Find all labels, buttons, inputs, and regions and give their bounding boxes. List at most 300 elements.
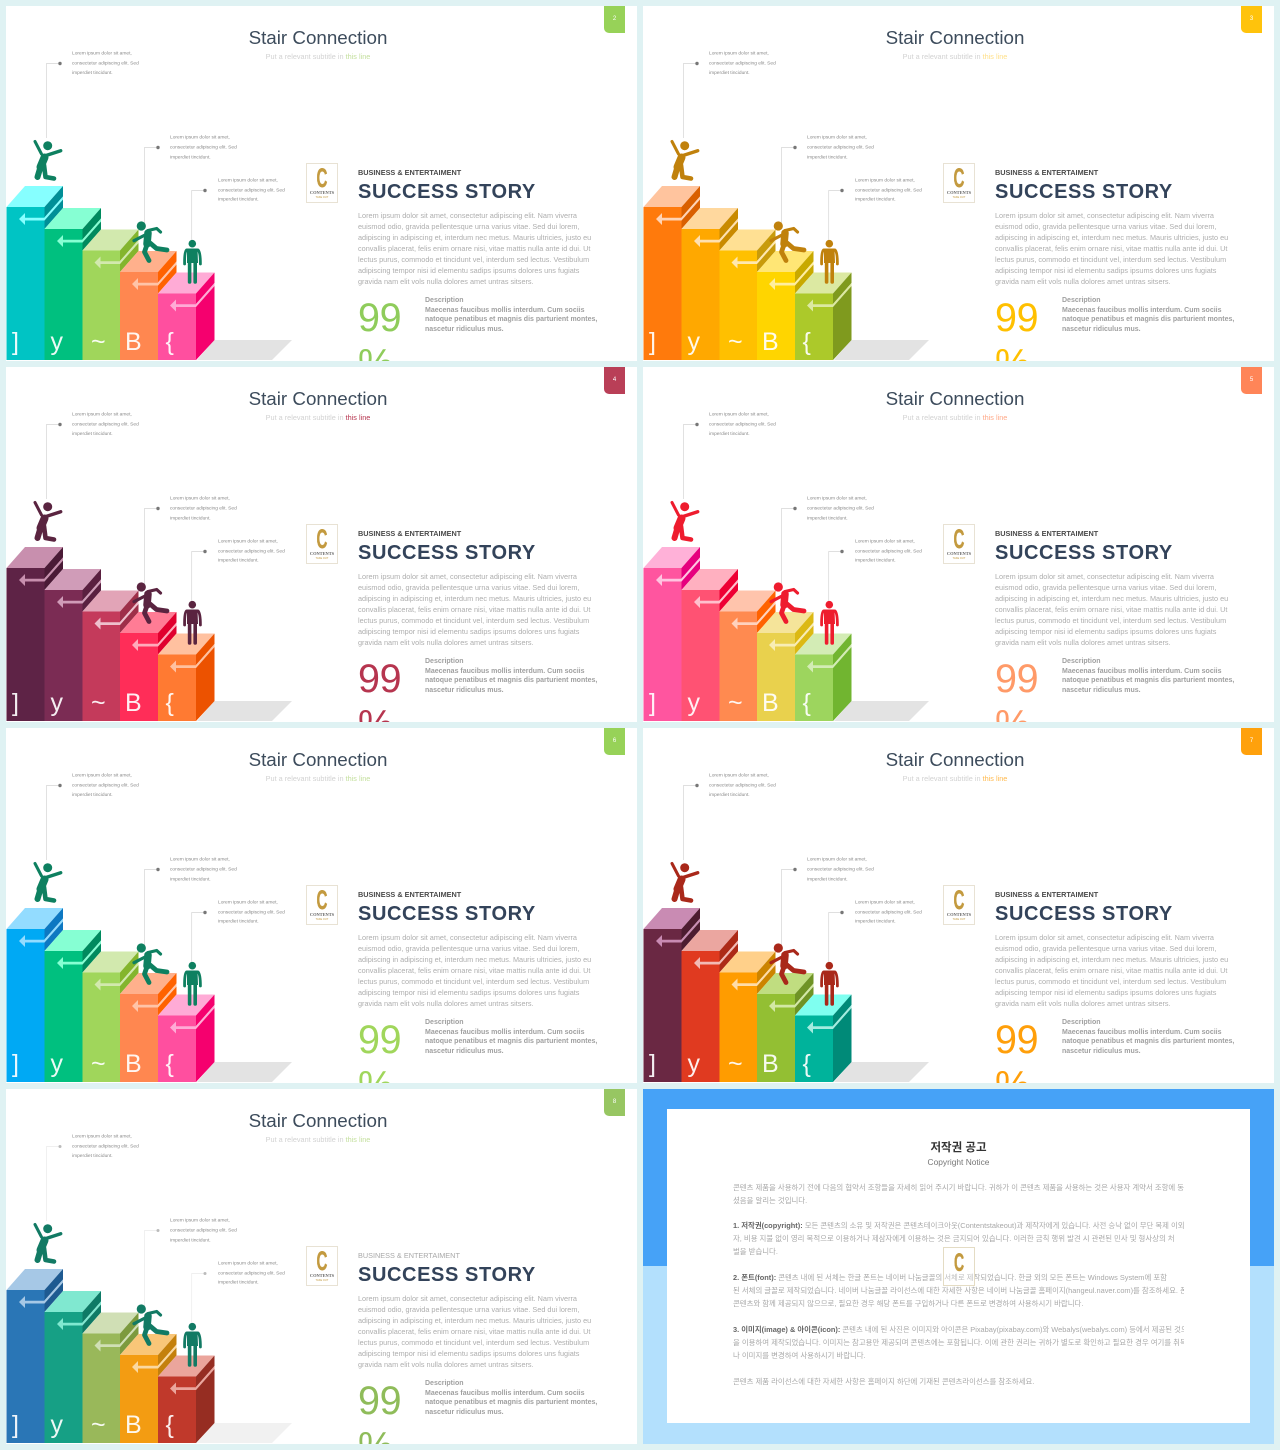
stair bar 3 [720,230,776,360]
title: Stair Connection [886,749,1024,770]
callout 1 [46,1133,139,1221]
eyebrow: BUSINESS & ENTERTAIMENT [995,890,1098,898]
subtitle: Put a relevant subtitle in this line [903,413,1007,422]
callout 1 [46,50,139,138]
bar icon glyphs [649,1050,811,1078]
stair bar 1 [6,1269,63,1443]
body text: euismod odio, gravida pellentesque urna varius vitae. Sed dui lorem, [358,583,579,592]
body text: convallis placerat, felis enim ornare nisi, vitae mattis nulla ante id dui. Ut [995,605,1227,614]
figure: standing person [822,601,837,643]
body text: euismod odio, gravida pellentesque urna varius vitae. Sed dui lorem, [358,222,579,231]
callout 1: imperdiet tincidunt. [709,70,750,76]
title: Stair Connection [249,27,387,48]
intro paragraph: 콘텐츠 제품을 사용하기 전에 다음의 협약서 조항들을 자세히 읽어 주시기 바랍니다. 귀하가 이 콘텐츠 제품을 사용하는 것은 사용자 계약서 조항에 동의하 [733,1183,1184,1192]
figure: standing person [185,1323,200,1365]
page badge [1241,728,1262,755]
panel: copyright notice [643,1089,1274,1444]
body text: convallis placerat, felis enim ornare nisi, vitae mattis nulla ante id dui. Ut [358,1327,590,1336]
bar icon glyphs: ~ [91,1050,106,1078]
body text: lectus purus, commodo et tincidunt vel, interdum sed lectus. Vestibulum [358,255,589,264]
subtitle: Put a relevant subtitle in this line [266,774,370,783]
figure: jumping person [672,502,698,540]
stair bar 1 [644,186,700,360]
figure: climbing person [771,943,804,982]
stair chart with callouts and figures [6,411,292,721]
body text: gravida nam elit vols nulla dolores amet untras sitsers. [995,999,1171,1008]
eyebrow: BUSINESS & ENTERTAIMENT [995,168,1098,176]
floor shadow [197,1062,292,1082]
bar icon glyphs: { [802,328,811,356]
callout 3: imperdiet tincidunt. [218,1280,259,1286]
callout 1: consectetur adipiscing elit. Sed [72,782,139,788]
page badge: 5 [1250,377,1253,383]
callout 1 [46,411,139,499]
description: Maecenas faucibus mollis interdum. Cum sociis [1062,1029,1222,1036]
description: nascetur ridiculus mus. [425,1048,504,1055]
bar icon glyphs: { [166,1050,174,1078]
description: natoque penatibus et magnis dis parturient montes, [425,1399,597,1406]
callout 1: Lorem ipsum dolor sit amet, [72,411,132,417]
logo: CONTENTS [947,190,971,195]
logo: C [954,885,964,915]
description [1062,296,1234,333]
stair bar 5 [158,634,214,721]
subtitle: Put a relevant subtitle in this line [266,52,370,61]
callout 3 [192,539,285,601]
big number: 99 [358,1018,401,1062]
logo: C [317,524,327,554]
callout 3: imperdiet tincidunt. [218,558,259,564]
page badge [604,728,625,755]
description: Maecenas faucibus mollis interdum. Cum sociis [425,1029,584,1036]
eyebrow: BUSINESS & ENTERTAIMENT [358,890,461,898]
intro paragraph [733,1183,1184,1205]
logo: CONTENTS [947,912,971,917]
stair bar 3 [720,590,776,721]
eyebrow: BUSINESS & ENTERTAIMENT [358,528,461,538]
stair bar 4 [120,1334,176,1443]
callout 2: imperdiet tincidunt. [807,515,848,521]
bar icon glyphs: { [166,328,174,356]
callout 3: consectetur adipiscing elit. Sed [218,910,285,916]
subtitle: Put a relevant subtitle in this line [903,774,1007,783]
callout 2: Lorem ipsum dolor sit amet, [807,857,867,863]
figure: standing person [185,962,200,1004]
stair bar 4 [757,612,814,721]
stair bar 1 [644,547,700,721]
big number [358,296,401,361]
title: Stair Connection [249,1110,387,1131]
callout 2 [144,135,237,223]
figure: standing person [822,240,837,282]
callout 1: consectetur adipiscing elit. Sed [72,1143,139,1149]
callout 2: imperdiet tincidunt. [170,515,211,521]
bar icon glyphs: ~ [728,689,743,717]
callout 1: consectetur adipiscing elit. Sed [709,421,776,427]
bar icon glyphs [649,689,811,717]
description: Description [425,658,464,665]
body text: euismod odio, gravida pellentesque urna varius vitae. Sed dui lorem, [358,1305,579,1314]
callout 2 [144,1218,237,1306]
floor shadow [197,701,292,721]
callout 2 [144,857,237,945]
callout 3: Lorem ipsum dolor sit amet, [218,178,278,184]
panel: slide 5 pink and lime stairs [643,367,1274,722]
bar icon glyphs [649,328,811,356]
body text: adipiscing in adipiscing et, interdum nec metus. Mauris ultricies, justo eu [358,594,591,603]
page badge [1241,367,1262,394]
bar icon glyphs: B [762,689,779,717]
bar icon glyphs: y [688,689,700,717]
stair bar 1 [6,547,63,721]
callout 1: Lorem ipsum dolor sit amet, [709,772,769,778]
heading: SUCCESS STORY [995,903,1173,925]
body text: adipiscing in adipiscing et, interdum nec metus. Mauris ultricies, justo eu [358,955,591,964]
stair bar 5 [795,272,852,360]
bar icon glyphs: ~ [728,328,743,356]
body text: euismod odio, gravida pellentesque urna varius vitae. Sed dui lorem, [995,944,1216,953]
floor shadow [197,340,292,360]
clause 2: 콘텐츠와 함께 제공되지 않으므로, 필요한 경우 해당 폰트를 구입하거나 다른 폰트로 변경하여 사용하시기 바랍니다. [733,1299,1083,1308]
callout 3 [829,178,922,240]
callout 2: Lorem ipsum dolor sit amet, [807,135,867,141]
logo: C [317,163,327,193]
stair bar 4 [120,612,176,721]
stair chart with callouts and figures [6,772,292,1082]
bar icon glyphs: y [50,328,64,356]
body text: convallis placerat, felis enim ornare nisi, vitae mattis nulla ante id dui. Ut [358,966,590,975]
callout 2: Lorem ipsum dolor sit amet, [170,135,230,141]
callout 3: consectetur adipiscing elit. Sed [218,549,285,555]
page badge: 2 [613,16,616,22]
description: Maecenas faucibus mollis interdum. Cum sociis [1062,668,1222,675]
heading: SUCCESS STORY [358,903,536,925]
callout 2: Lorem ipsum dolor sit amet, [170,1218,230,1224]
logo: CONTENTS [310,190,334,195]
figure: climbing person [134,221,167,260]
logo [306,163,338,203]
clause 1: 벌을 받습니다. [733,1247,778,1256]
figure: climbing person [771,221,804,260]
clause 1: 자, 비용 지불 없이 영리 목적으로 이용하거나 제삼자에게 이용하는 것은 금지되어 있습니다. 이러한 금칙 행위 발견 시 관련된 민사 및 형사상의 처 [733,1234,1175,1243]
logo: CONTENTS [947,551,971,556]
logo [306,1246,338,1286]
bar icon glyphs: y [50,1411,64,1439]
page badge: 4 [613,377,616,383]
big number [995,1018,1038,1083]
callout 1: imperdiet tincidunt. [72,1153,113,1159]
callout 2: imperdiet tincidunt. [807,876,848,882]
description [425,1380,597,1416]
callout 2: consectetur adipiscing elit. Sed [170,1228,237,1234]
big number [358,1379,401,1444]
callout 1: Lorem ipsum dolor sit amet, [72,50,132,56]
big number: 99 [358,1379,401,1423]
stair bar 3 [82,1312,138,1443]
body text [995,572,1228,647]
callout 3: Lorem ipsum dolor sit amet, [218,1261,278,1267]
big number: 99 [358,296,401,340]
body text: adipiscing in adipiscing et, interdum nec metus. Mauris ultricies, justo eu [995,233,1228,242]
stair bar 2 [682,569,738,721]
panel: slide 3 orange and yellow stairs [643,6,1274,361]
heading: SUCCESS STORY [995,542,1173,564]
figure: jumping person [672,863,698,900]
callout 2: consectetur adipiscing elit. Sed [807,145,874,151]
heading: SUCCESS STORY [995,181,1173,203]
callout 1: Lorem ipsum dolor sit amet, [709,50,769,56]
callout 3: Lorem ipsum dolor sit amet, [855,900,915,906]
description: nascetur ridiculus mus. [425,1409,504,1416]
bar icon glyphs: y [688,1050,700,1078]
body text [358,1294,591,1369]
panel: slide 2 aqua and pink stairs [6,6,637,361]
description: natoque penatibus et magnis dis parturient montes, [425,1038,597,1045]
stair chart with callouts and figures [644,50,929,360]
description: Description [1062,297,1101,304]
description [425,296,597,333]
callout 1: consectetur adipiscing elit. Sed [709,782,776,788]
description: natoque penatibus et magnis dis parturient montes, [425,677,597,684]
logo: CONTENTS [310,1273,334,1278]
clause 3: 나 이미지를 변경하여 사용하시기 바랍니다. [733,1351,866,1360]
body text: adipiscing tempor nisi id elementu sadips ipsums dolores uns fugiats [995,627,1216,636]
figure: climbing person [134,943,167,982]
stair bar 2 [44,569,101,721]
bar icon glyphs: B [762,328,779,356]
callout 3: consectetur adipiscing elit. Sed [218,188,285,194]
logo: C [317,885,327,915]
body text: adipiscing in adipiscing et, interdum nec metus. Mauris ultricies, justo eu [358,1316,591,1325]
subtitle: Put a relevant subtitle in this line [903,52,1007,61]
stair bar 5 [158,994,214,1082]
stair bar 2 [44,1291,101,1443]
bar icon glyphs: B [125,1050,142,1078]
bar icon glyphs: { [802,1050,811,1078]
callout 3: imperdiet tincidunt. [218,919,259,925]
body text: adipiscing in adipiscing et, interdum nec metus. Mauris ultricies, justo eu [358,233,591,242]
description: Maecenas faucibus mollis interdum. Cum sociis [425,1390,584,1397]
stair bar 5 [795,994,852,1082]
body text: lectus purus, commodo et tincidunt vel, interdum sed lectus. Vestibulum [995,977,1226,986]
callout 3: consectetur adipiscing elit. Sed [855,910,922,916]
floor shadow [197,1423,292,1443]
bar icon glyphs: { [166,689,174,717]
title: Stair Connection [886,388,1024,409]
body text [995,210,1228,286]
body text: adipiscing tempor nisi id elementu sadips ipsums dolores uns fugiats [358,988,579,997]
callout 3: Lorem ipsum dolor sit amet, [218,900,278,906]
subtitle: Put a relevant subtitle in this line [266,413,370,422]
body text: convallis placerat, felis enim ornare nisi, vitae mattis nulla ante id dui. Ut [358,605,590,614]
big number: 99 [995,296,1038,340]
body text [358,932,591,1008]
logo: TAKE OUT [316,196,328,199]
bar icon glyphs: ~ [728,1050,743,1078]
bar icon glyphs: { [166,1411,174,1439]
big number: 99 [995,1018,1038,1062]
description: Maecenas faucibus mollis interdum. Cum sociis [425,307,584,314]
body text: Lorem ipsum dolor sit amet, consectetur adipiscing elit. Nam viverra [995,572,1214,580]
logo [306,524,338,564]
figure: standing person [185,601,200,643]
description: nascetur ridiculus mus. [425,326,504,333]
bar icon glyphs: ] [12,1411,19,1439]
description [425,658,597,694]
body text: Lorem ipsum dolor sit amet, consectetur adipiscing elit. Nam viverra [358,932,577,942]
body text: adipiscing in adipiscing et, interdum nec metus. Mauris ultricies, justo eu [995,955,1228,964]
logo: TAKE OUT [316,1279,328,1282]
callout 1: Lorem ipsum dolor sit amet, [72,1133,132,1139]
bar icon glyphs: y [50,689,64,717]
callout 2: consectetur adipiscing elit. Sed [807,867,874,873]
body text: gravida nam elit vols nulla dolores amet untras sitsers. [358,638,534,647]
heading: SUCCESS STORY [358,1264,536,1286]
title: Stair Connection [249,749,387,770]
callout 2: imperdiet tincidunt. [170,154,211,160]
callout 1: consectetur adipiscing elit. Sed [709,60,776,66]
body text: adipiscing tempor nisi id elementu sadips ipsums dolores uns fugiats [358,266,579,275]
body text [358,210,591,286]
description: Maecenas faucibus mollis interdum. Cum sociis [425,668,584,675]
callout 3: consectetur adipiscing elit. Sed [218,1271,285,1277]
big number: 99 [995,657,1038,701]
page badge: 8 [613,1099,616,1105]
body text: lectus purus, commodo et tincidunt vel, interdum sed lectus. Vestibulum [995,616,1226,625]
bar icon glyphs: ~ [91,328,106,356]
bar icon glyphs: ] [12,689,19,717]
stair chart with callouts and figures [644,772,929,1082]
bar icon glyphs: y [688,328,700,356]
body text: lectus purus, commodo et tincidunt vel, interdum sed lectus. Vestibulum [995,255,1226,264]
panel: slide 7 plum, red and teal stairs [643,728,1274,1083]
bar icon glyphs: ] [649,1050,656,1078]
description: natoque penatibus et magnis dis parturient montes, [1062,1038,1234,1045]
body text: convallis placerat, felis enim ornare nisi, vitae mattis nulla ante id dui. Ut [358,244,590,253]
closing line: 콘텐츠 제품 라이선스에 대한 자세한 사항은 홈페이지 하단에 기재된 콘텐츠라이선스를 참조하세요. [733,1377,1034,1386]
figure: climbing person [771,582,804,622]
body text: euismod odio, gravida pellentesque urna varius vitae. Sed dui lorem, [995,583,1216,592]
description: Maecenas faucibus mollis interdum. Cum sociis [1062,307,1222,314]
big number [358,657,401,722]
figure: climbing person [134,582,167,622]
callout 3: Lorem ipsum dolor sit amet, [218,539,278,545]
body text: convallis placerat, felis enim ornare nisi, vitae mattis nulla ante id dui. Ut [995,244,1227,253]
bar icon glyphs: ~ [91,1411,106,1439]
figure: jumping person [35,502,61,540]
stair bar 2 [44,930,101,1082]
body text: euismod odio, gravida pellentesque urna varius vitae. Sed dui lorem, [995,222,1216,231]
intro paragraph: 셨음을 알리는 것입니다. [733,1196,807,1205]
big number: 99 [358,657,401,701]
callout 1: imperdiet tincidunt. [72,70,113,76]
description [1062,1018,1234,1055]
body text [995,932,1228,1008]
figure: standing person [822,962,837,1004]
stair bar 2 [44,208,101,360]
stair bar 3 [82,230,138,360]
page badge: 7 [1250,738,1253,744]
logo: CONTENTS [310,912,334,917]
callout 2: imperdiet tincidunt. [170,1237,211,1243]
notice card [667,1109,1250,1423]
callout 1: imperdiet tincidunt. [72,792,113,798]
callout 3: consectetur adipiscing elit. Sed [855,188,922,194]
logo [943,163,975,203]
callout 2: Lorem ipsum dolor sit amet, [807,496,867,502]
callout 1 [684,50,776,138]
logo: TAKE OUT [953,196,965,199]
big number [358,1018,401,1083]
bar icon glyphs: B [762,1050,779,1078]
body text: gravida nam elit vols nulla dolores amet untras sitsers. [358,277,534,286]
floor shadow [834,340,929,360]
logo: C [954,524,964,554]
body text: lectus purus, commodo et tincidunt vel, interdum sed lectus. Vestibulum [358,1338,589,1347]
stair chart with callouts and figures [6,1133,292,1443]
page badge [604,367,625,394]
description: natoque penatibus et magnis dis parturient montes, [425,316,597,323]
callout 3 [829,900,922,962]
description: Description [1062,1019,1101,1026]
callout 3 [192,900,285,962]
figure: jumping person [35,141,61,178]
stair chart with callouts and figures [644,411,929,721]
heading: SUCCESS STORY [358,542,536,564]
callout 3: Lorem ipsum dolor sit amet, [855,539,915,545]
stair bar 3 [82,590,138,721]
bar icon glyphs [12,328,174,356]
body text: gravida nam elit vols nulla dolores amet untras sitsers. [358,1360,534,1369]
description: nascetur ridiculus mus. [1062,1048,1141,1055]
description [1062,658,1234,694]
eyebrow: BUSINESS & ENTERTAIMENT [358,168,461,176]
figure: standing person [185,240,200,282]
callout 3 [192,178,285,240]
callout 3: consectetur adipiscing elit. Sed [855,549,922,555]
callout 1: consectetur adipiscing elit. Sed [72,60,139,66]
bar icon glyphs: y [50,1050,64,1078]
logo: C [954,163,964,193]
callout 3 [829,539,922,601]
callout 1: imperdiet tincidunt. [709,792,750,798]
stair bar 2 [682,208,738,360]
bar icon glyphs [12,689,174,717]
logo: CONTENTS [310,551,334,556]
callout 1: Lorem ipsum dolor sit amet, [709,411,769,417]
floor shadow [834,1062,929,1082]
body text: Lorem ipsum dolor sit amet, consectetur adipiscing elit. Nam viverra [358,210,577,220]
floor shadow [834,701,929,721]
bar icon glyphs: ~ [91,689,106,717]
stair chart with callouts and figures [6,50,292,360]
stair bar 4 [757,251,814,360]
callout 1: consectetur adipiscing elit. Sed [72,421,139,427]
callout 2: consectetur adipiscing elit. Sed [170,145,237,151]
bar icon glyphs: ] [12,1050,19,1078]
figure: jumping person [672,141,698,178]
logo: TAKE OUT [316,557,328,560]
stair bar 5 [795,634,852,721]
stair bar 1 [6,186,63,360]
eyebrow: BUSINESS & ENTERTAIMENT [358,1250,460,1260]
notice subtitle: Copyright Notice [928,1157,989,1167]
description: natoque penatibus et magnis dis parturient montes, [1062,677,1234,684]
clause 1 [733,1221,1184,1256]
clause 3 [733,1325,1184,1360]
stair bar 4 [757,973,814,1082]
bar icon glyphs: B [125,328,142,356]
